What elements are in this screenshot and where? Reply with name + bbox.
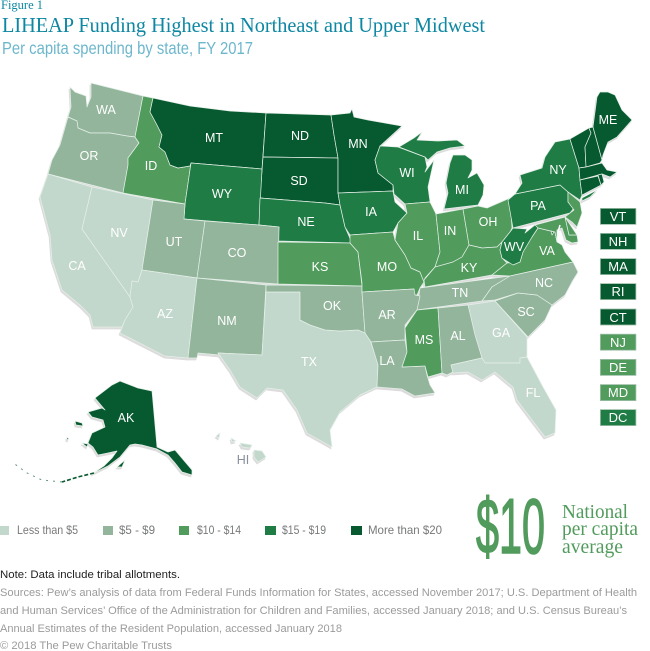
state: SD: [260, 157, 340, 205]
state abbreviations: TX: [301, 355, 318, 369]
state abbreviations: TN: [452, 286, 468, 300]
small-state boxes: MA: [608, 259, 628, 274]
state: MI upper peninsula: [399, 132, 465, 160]
state abbreviations: MI: [455, 183, 469, 197]
state: NE: [259, 198, 352, 243]
state abbreviations: NC: [535, 276, 553, 290]
state: RI: [598, 174, 604, 185]
state: MN: [331, 109, 402, 193]
state abbreviations: AL: [450, 329, 466, 343]
state abbreviations: AZ: [157, 307, 173, 321]
small-state boxes: VT: [610, 209, 626, 224]
state abbreviations: OH: [479, 215, 497, 229]
state abbreviations: IL: [413, 229, 423, 243]
small-state boxes: MD: [608, 385, 628, 400]
state abbreviations: CA: [68, 259, 86, 273]
state abbreviations: MS: [415, 333, 433, 347]
small-state boxes: NJ: [610, 335, 626, 350]
state abbreviations: LA: [379, 354, 395, 368]
state: NH: [585, 127, 602, 167]
state: AK: [88, 381, 192, 475]
small-state boxes: NH: [609, 234, 627, 249]
state: NY: [515, 139, 582, 200]
state abbreviations: GA: [492, 326, 511, 340]
state: TN: [417, 276, 510, 310]
legend: More than $20: [368, 523, 442, 537]
state abbreviations: WV: [504, 240, 525, 254]
state: NC: [482, 262, 578, 305]
state: TX: [218, 292, 378, 447]
state: ID: [123, 96, 191, 204]
state: LA: [371, 340, 435, 396]
subtitle: Per capita spending by state, FY 2017: [2, 38, 253, 58]
state: KS: [278, 242, 362, 286]
state: OR: [48, 117, 139, 193]
state: VT: [570, 128, 591, 168]
state abbreviations: NV: [110, 226, 128, 240]
title: LIHEAP Funding Highest in Northeast and Upper Midwest: [2, 13, 485, 37]
state: DC: [551, 231, 554, 235]
state: MT: [150, 98, 266, 169]
state: HI: [216, 433, 266, 462]
note and sources: Note: Data include tribal allotments.: [0, 569, 180, 581]
state: GA: [468, 301, 527, 363]
state: VA: [492, 228, 573, 276]
legend: $5 - $9: [119, 523, 155, 537]
state abbreviations: NY: [549, 163, 567, 177]
state abbreviations: ND: [291, 129, 309, 143]
state: MD: [525, 217, 578, 243]
state: WY: [184, 163, 262, 225]
state: CO: [197, 221, 279, 284]
state abbreviations: MO: [377, 260, 397, 274]
state abbreviations: OR: [80, 149, 98, 163]
legend: Less than $5: [17, 523, 78, 537]
state abbreviations: MN: [348, 137, 368, 151]
Alaska islands: [67, 421, 125, 467]
state: IA: [338, 191, 407, 235]
state: IL: [395, 202, 440, 282]
state: UT: [142, 200, 205, 278]
state: FL: [451, 357, 556, 437]
map of US states: [40, 83, 632, 475]
state abbreviations: WI: [399, 166, 415, 180]
state: WA: [68, 83, 143, 137]
national average callout: per capita: [562, 519, 638, 540]
state abbreviations: AK: [118, 411, 135, 425]
state abbreviations: [68, 103, 617, 467]
state abbreviations: ID: [145, 159, 157, 173]
legend: [0, 523, 442, 537]
state abbreviations: WA: [96, 103, 116, 117]
state: Long Island: [582, 190, 597, 201]
state abbreviations: KS: [312, 260, 328, 274]
state abbreviations: MT: [205, 131, 223, 145]
state: NM: [188, 278, 266, 358]
state: OH: [463, 198, 512, 248]
Aleutian island chain: [62, 473, 94, 482]
state: OK: [266, 285, 365, 333]
national average callout: National: [562, 502, 629, 523]
state abbreviations: OK: [323, 299, 342, 313]
state abbreviations: NE: [297, 215, 315, 229]
legend: $15 - $19: [282, 523, 326, 537]
state abbreviations: ME: [599, 113, 617, 127]
state: MS: [402, 308, 442, 377]
state abbreviations: FL: [526, 386, 540, 400]
state: AR: [362, 289, 420, 342]
state abbreviations: WY: [212, 187, 233, 201]
legend: $10 - $14: [197, 523, 241, 537]
state abbreviations: PA: [530, 199, 547, 213]
state: AL: [438, 305, 482, 375]
state: SC: [495, 293, 552, 337]
national average callout: average: [562, 537, 623, 558]
state: ME: [593, 92, 632, 160]
small-state boxes: CT: [609, 310, 627, 325]
state abbreviations: NM: [217, 314, 237, 328]
small-state boxes: DE: [609, 360, 627, 375]
small-state boxes: DC: [609, 410, 627, 425]
western Aleutian islands: [12, 462, 62, 482]
national average callout: $10: [476, 482, 545, 570]
state abbreviations: IN: [444, 224, 456, 238]
note and sources: [0, 569, 637, 651]
state: NV: [82, 187, 153, 297]
state: NJ: [565, 192, 582, 227]
state: CA: [40, 174, 133, 327]
state: KY: [424, 242, 507, 287]
note and sources: Annual Estimates of the Resident Population, accessed January 2018: [0, 623, 342, 635]
state: WI: [375, 146, 434, 204]
state abbreviations: SD: [290, 174, 308, 188]
note and sources: Sources: Pew’s analysis of data from Federal Funds Information for States, accessed November 2017; U.S. Department of Health: [0, 587, 637, 599]
small-state boxes: RI: [612, 284, 624, 299]
state: MI lower peninsula: [444, 155, 484, 209]
state: ND: [263, 113, 338, 158]
state: DE: [565, 217, 577, 235]
note and sources: and Human Services’ Office of the Administration for Children and Families, accessed January 2018; and U.S. Census Bureau’s: [0, 605, 627, 617]
state: AZ: [120, 270, 197, 358]
state abbreviations: AR: [378, 308, 396, 322]
state: MO: [350, 232, 424, 295]
state: MA: [579, 163, 617, 180]
small-state boxes: [600, 208, 636, 426]
state: WV: [500, 225, 538, 265]
state abbreviations: UT: [166, 235, 183, 249]
Chesapeake Bay: [558, 225, 566, 245]
state abbreviations: IA: [365, 205, 378, 219]
state abbreviations: SC: [517, 305, 535, 319]
state: IN: [435, 209, 469, 268]
state abbreviations: HI: [237, 453, 249, 467]
state: CT: [580, 176, 601, 195]
state abbreviations: CO: [228, 246, 247, 260]
state abbreviations: KY: [461, 261, 478, 275]
state: PA: [508, 185, 574, 228]
state abbreviations: VA: [539, 244, 556, 258]
